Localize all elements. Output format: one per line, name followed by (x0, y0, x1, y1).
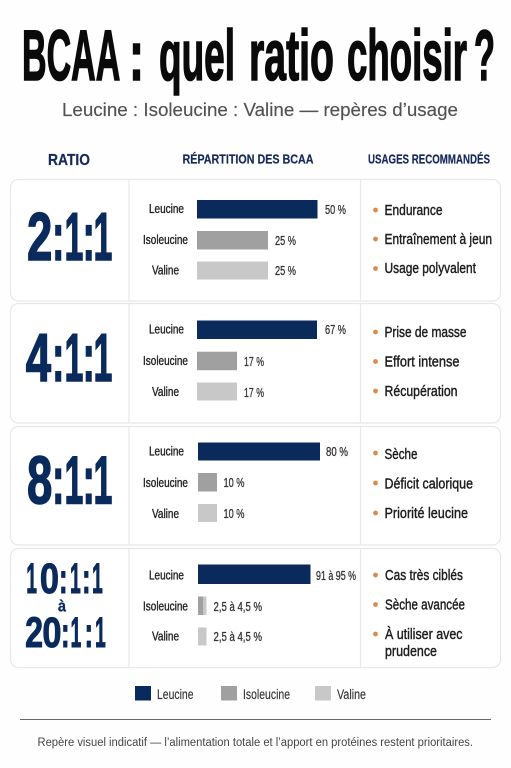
footnote: Repère visuel indicatif — l’alimentation totale et l’apport en protéines restent prioritaires. (38, 737, 473, 749)
bar: Leucine 67 %: 67 % (325, 323, 346, 337)
ratio label (25, 554, 106, 657)
bar: Isoleucine 25 %: 25 % (275, 234, 296, 248)
panel: ratio 10:1:1 à 20:1:1 (10, 548, 500, 668)
ratio label: : (82, 442, 95, 518)
ratio label: 4 (26, 321, 51, 396)
bar chart (143, 442, 348, 522)
column header: répartition: RÉPARTITION DES BCAA (182, 152, 314, 166)
ratio label: : (59, 554, 68, 603)
bar: Valine 17 %: Valine (152, 385, 179, 399)
ratio label (27, 442, 112, 519)
usages list: Priorité leucine (384, 506, 468, 522)
ratio label: 1 (64, 443, 83, 519)
bar: Leucine 80 %: 80 % (326, 445, 348, 459)
bar: Leucine 80 % (149, 442, 348, 460)
ratio label: : (82, 198, 95, 275)
bar: Valine 10 %: 10 % (224, 507, 244, 521)
bar: Valine 2,5 à 4,5 % (152, 628, 262, 646)
ratio label: 2 (25, 610, 43, 657)
bar: Leucine 50 %: Leucine (149, 202, 184, 216)
bar chart (143, 564, 356, 646)
usages list (373, 203, 492, 277)
bar: Leucine 91 à 95 % (149, 564, 356, 584)
usages list (373, 447, 473, 522)
bar: Isoleucine 17 %: Isoleucine (143, 354, 188, 368)
bar: Isoleucine 25 % (143, 231, 296, 250)
ratio label: 1 (94, 443, 112, 519)
bar chart (143, 320, 346, 400)
usages list: Déficit calorique (384, 476, 473, 492)
legend: Isoleucine (243, 687, 290, 702)
bar: Valine 25 % (152, 262, 296, 280)
usages list: Prise de masse (384, 325, 466, 341)
bar: Isoleucine 10 % (143, 473, 244, 492)
ratio label: 1 (64, 320, 83, 396)
bar: Leucine 91 à 95 %: Leucine (149, 568, 184, 582)
ratio label: : (61, 608, 70, 657)
bar: Valine 25 %: Valine (152, 264, 179, 278)
ratio label: : (52, 319, 64, 396)
bar: Isoleucine 2,5 à 4,5 %: 2,5 à 4,5 % (214, 600, 262, 614)
ratio label: 1 (26, 556, 37, 603)
title: ratio (249, 17, 334, 96)
title: quel (159, 17, 235, 96)
bar: Isoleucine 17 % (143, 352, 264, 370)
bar: Isoleucine 10 %: 10 % (224, 476, 244, 490)
bar: Valine 2,5 à 4,5 %: 2,5 à 4,5 % (214, 630, 262, 644)
usages list: Endurance (384, 203, 442, 219)
ratio label: 1 (92, 556, 103, 603)
ratio label: : (82, 319, 95, 396)
ratio label: : (82, 554, 91, 603)
ratio label: 2 (27, 200, 52, 275)
ratio label: 1 (70, 556, 81, 603)
ratio label: : (52, 442, 64, 518)
usages list: prudence (385, 644, 437, 660)
bar: Leucine 67 %: Leucine (149, 322, 184, 336)
usages list: Sèche avancée (385, 598, 465, 614)
ratio label: 1 (94, 320, 112, 396)
panel: ratio 4:1:1 (10, 304, 500, 423)
ratio label: à (58, 596, 66, 616)
ratio label: 1 (70, 610, 81, 657)
bar: Valine 17 %: 17 % (244, 386, 264, 400)
legend (135, 686, 366, 702)
ratio label: : (84, 608, 93, 657)
title: : (129, 17, 144, 96)
bar: Valine 10 % (152, 504, 244, 522)
bar: Isoleucine 2,5 à 4,5 % (143, 596, 262, 615)
bar: Leucine 80 %: Leucine (149, 444, 184, 458)
bar: Leucine 67 % (149, 320, 346, 339)
bar: Valine 25 %: 25 % (275, 264, 296, 278)
bar: Leucine 91 à 95 %: 91 à 95 % (316, 569, 356, 583)
subtitle: Leucine : Isoleucine : Valine — repères d’usage (62, 99, 458, 120)
ratio label (27, 198, 112, 275)
column header: ratio: RATIO (48, 152, 90, 169)
panel: ratio 8:1:1 (10, 426, 500, 545)
ratio label: : (52, 198, 64, 275)
usages list: Usage polyvalent (384, 261, 476, 277)
bar: Valine 17 % (152, 382, 264, 400)
ratio label: 1 (94, 199, 112, 275)
bar: Valine 10 %: Valine (152, 507, 179, 521)
ratio label: 0 (40, 555, 59, 603)
ratio label (26, 319, 112, 396)
bar chart (143, 200, 346, 280)
legend: Valine (337, 687, 366, 702)
legend: Leucine (157, 687, 194, 702)
bar: Leucine 50 %: 50 % (325, 203, 346, 217)
bar: Isoleucine 17 %: 17 % (244, 355, 264, 369)
bar: Isoleucine 25 %: Isoleucine (143, 233, 188, 247)
usages list: Sèche (384, 447, 418, 463)
ratio label: 0 (42, 609, 62, 657)
usages list (373, 325, 466, 400)
bar: Isoleucine 10 %: Isoleucine (143, 476, 188, 490)
bar: Valine 2,5 à 4,5 %: Valine (152, 630, 179, 644)
bar: Isoleucine 2,5 à 4,5 %: Isoleucine (143, 600, 188, 614)
panel: ratio 2:1:1 (10, 180, 500, 301)
ratio label: 1 (95, 610, 106, 657)
usages list: Récupération (384, 384, 458, 400)
ratio label: 1 (64, 199, 83, 275)
usages list: Cas très ciblés (385, 568, 463, 584)
usages list (373, 568, 465, 660)
bar: Leucine 50 % (149, 200, 346, 218)
title: BCAA (22, 17, 120, 96)
usages list: À utiliser avec (385, 626, 462, 643)
usages list: Effort intense (384, 354, 460, 370)
ratio label: 8 (27, 444, 52, 519)
